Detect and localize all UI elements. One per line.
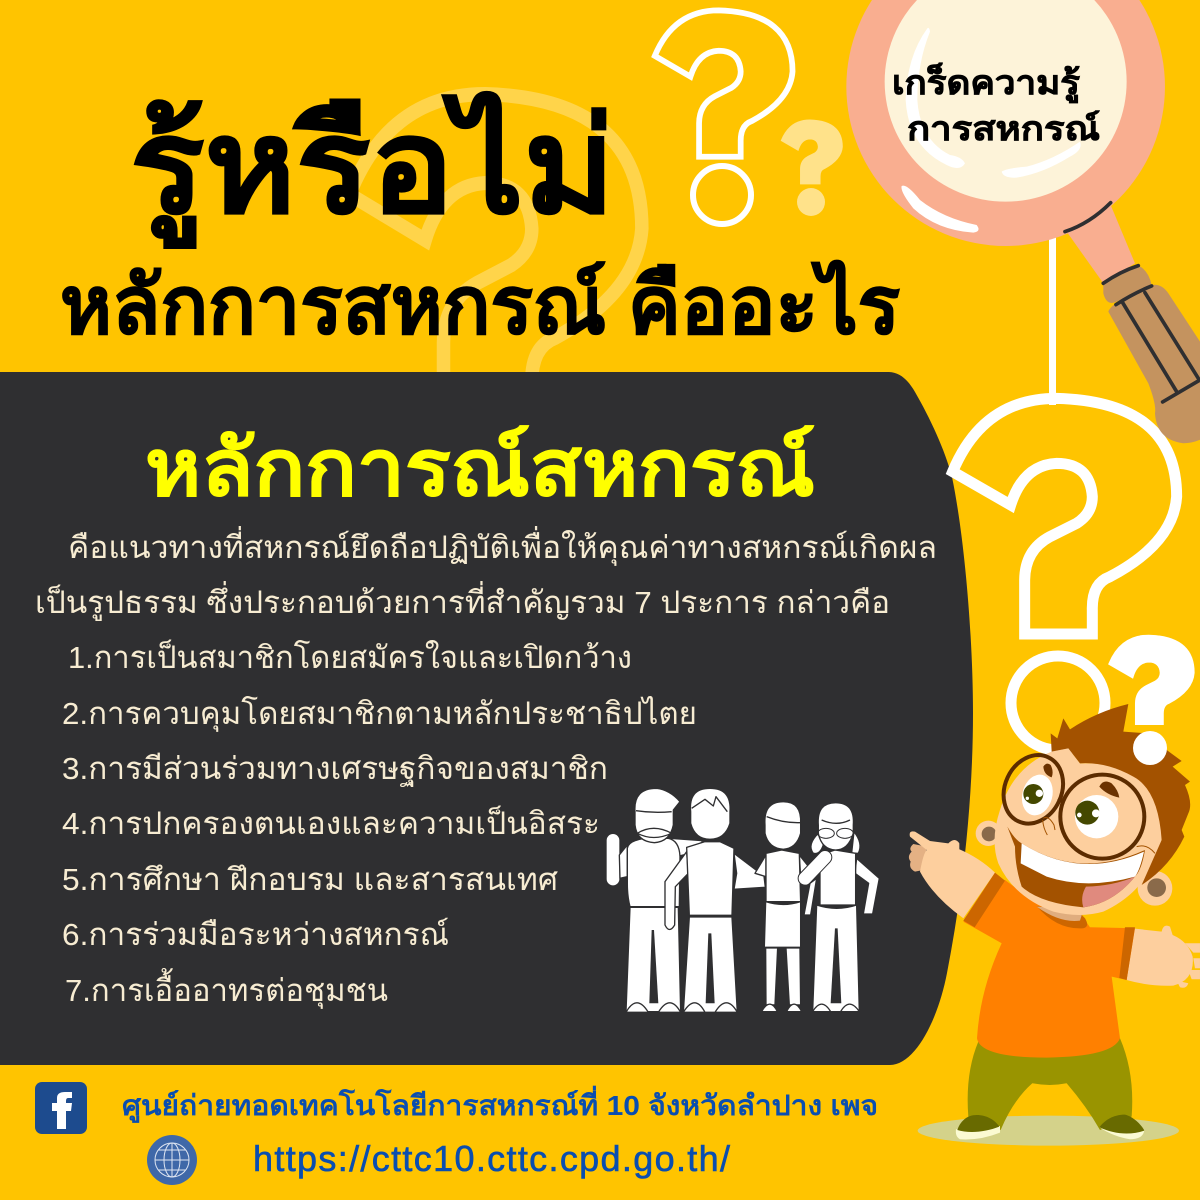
- tongue: [1082, 877, 1135, 907]
- trousers: [968, 1038, 1132, 1130]
- left hand and arm: [909, 831, 995, 918]
- icon: group of four people: [606, 788, 879, 1012]
- icon: solid white question mark: [1111, 637, 1193, 765]
- icon: hanging line: [1049, 235, 1056, 405]
- text block: definition and list: คือแนวทางที่สหกรณ์ยึดถือปฏิบัติเพื่อให้คุณค่าทางสหกรณ์เกิดผล: [68, 526, 937, 567]
- face: [995, 748, 1162, 915]
- mouth: [1007, 827, 1145, 907]
- glasses: [993, 745, 1144, 859]
- body of the boy: [909, 831, 1200, 1146]
- text block: definition and list: 4.การปกครองตนเองและความเป็นอิสระ: [62, 805, 600, 841]
- person 1: [606, 788, 703, 1012]
- right hand and arm: [1127, 926, 1200, 988]
- left eye: [1017, 771, 1057, 819]
- icon: top outlined question mark: [655, 10, 793, 224]
- left shoe: [956, 1115, 1000, 1139]
- icon: pale small question mark: [782, 121, 841, 216]
- nose and smile lines: [1043, 817, 1155, 853]
- background faint question mark: [350, 94, 642, 416]
- shirt: [963, 880, 1135, 1058]
- wood grip: [1103, 266, 1200, 443]
- text: lens label: เกร็ดความรู้: [892, 62, 1080, 104]
- outer rim: [846, 0, 1165, 246]
- head of the boy: [976, 704, 1190, 928]
- heading: cooperative principles yellow: หลักการณ์สหกรณ์: [145, 424, 815, 512]
- text block: definition and list: 6.การร่วมมือระหว่างสหกรณ์: [62, 917, 449, 952]
- panel: dark content background: [0, 372, 973, 1065]
- text block: definition and list: 7.การเอื้ออาทรต่อชุมชน: [65, 968, 388, 1010]
- highlights: [901, 28, 1081, 233]
- icon: globe: [147, 1135, 197, 1185]
- text: lens label: [892, 62, 1100, 147]
- text block: definition and list: เป็นรูปธรรม ซึ่งประกอบด้วยการที่สำคัญรวม 7 ประการ กล่าวคือ: [35, 581, 890, 621]
- handle: [1067, 203, 1135, 283]
- ears: [976, 821, 1172, 906]
- text block: definition and list: 3.การมีส่วนร่วมทางเศรษฐกิจของสมาชิก: [62, 751, 608, 787]
- lens: [885, 0, 1127, 202]
- right eye: [1075, 795, 1118, 838]
- text: footer organisation: ศูนย์ถ่ายทอดเทคโนโลยีการสหกรณ์ที่ 10 จังหวัดลำปาง เพจ: [122, 1085, 878, 1123]
- text block: definition and list: 2.การควบคุมโดยสมาชิกตามหลักประชาธิปไตย: [62, 696, 697, 733]
- teeth: [1021, 843, 1144, 883]
- shadow: [918, 1116, 1179, 1146]
- icon: big outlined question mark: [953, 398, 1177, 750]
- person 3: [755, 802, 809, 1012]
- text block: definition and list: 1.การเป็นสมาชิกโดยสมัครใจและเปิดกว้าง: [68, 639, 632, 675]
- person 4: [804, 803, 879, 1012]
- text block: definition and list: [35, 526, 937, 1010]
- text: website url: https://cttc10.cttc.cpd.go.th/: [253, 1138, 730, 1179]
- eyebrows: [1043, 764, 1119, 798]
- neck: [1037, 907, 1083, 921]
- title: did you know: รู้หรือไม่: [130, 91, 615, 249]
- text block: definition and list: 5.การศึกษา ฝึกอบรม และสารสนเทศ: [62, 862, 558, 897]
- collar: [1037, 906, 1087, 928]
- heading: what are cooperative principles: หลักการสหกรณ์ คืออะไร: [60, 259, 900, 350]
- illustration: cartoon boy with glasses: [909, 704, 1200, 1146]
- text: lens label: การสหกรณ์: [907, 110, 1100, 147]
- hair: [1051, 704, 1190, 885]
- right shoe: [1099, 1115, 1144, 1139]
- sleeve bands: [963, 873, 1135, 980]
- person 2: [665, 788, 765, 1012]
- icon: magnifying glass: [846, 0, 1200, 443]
- icon: facebook logo: [35, 1082, 87, 1134]
